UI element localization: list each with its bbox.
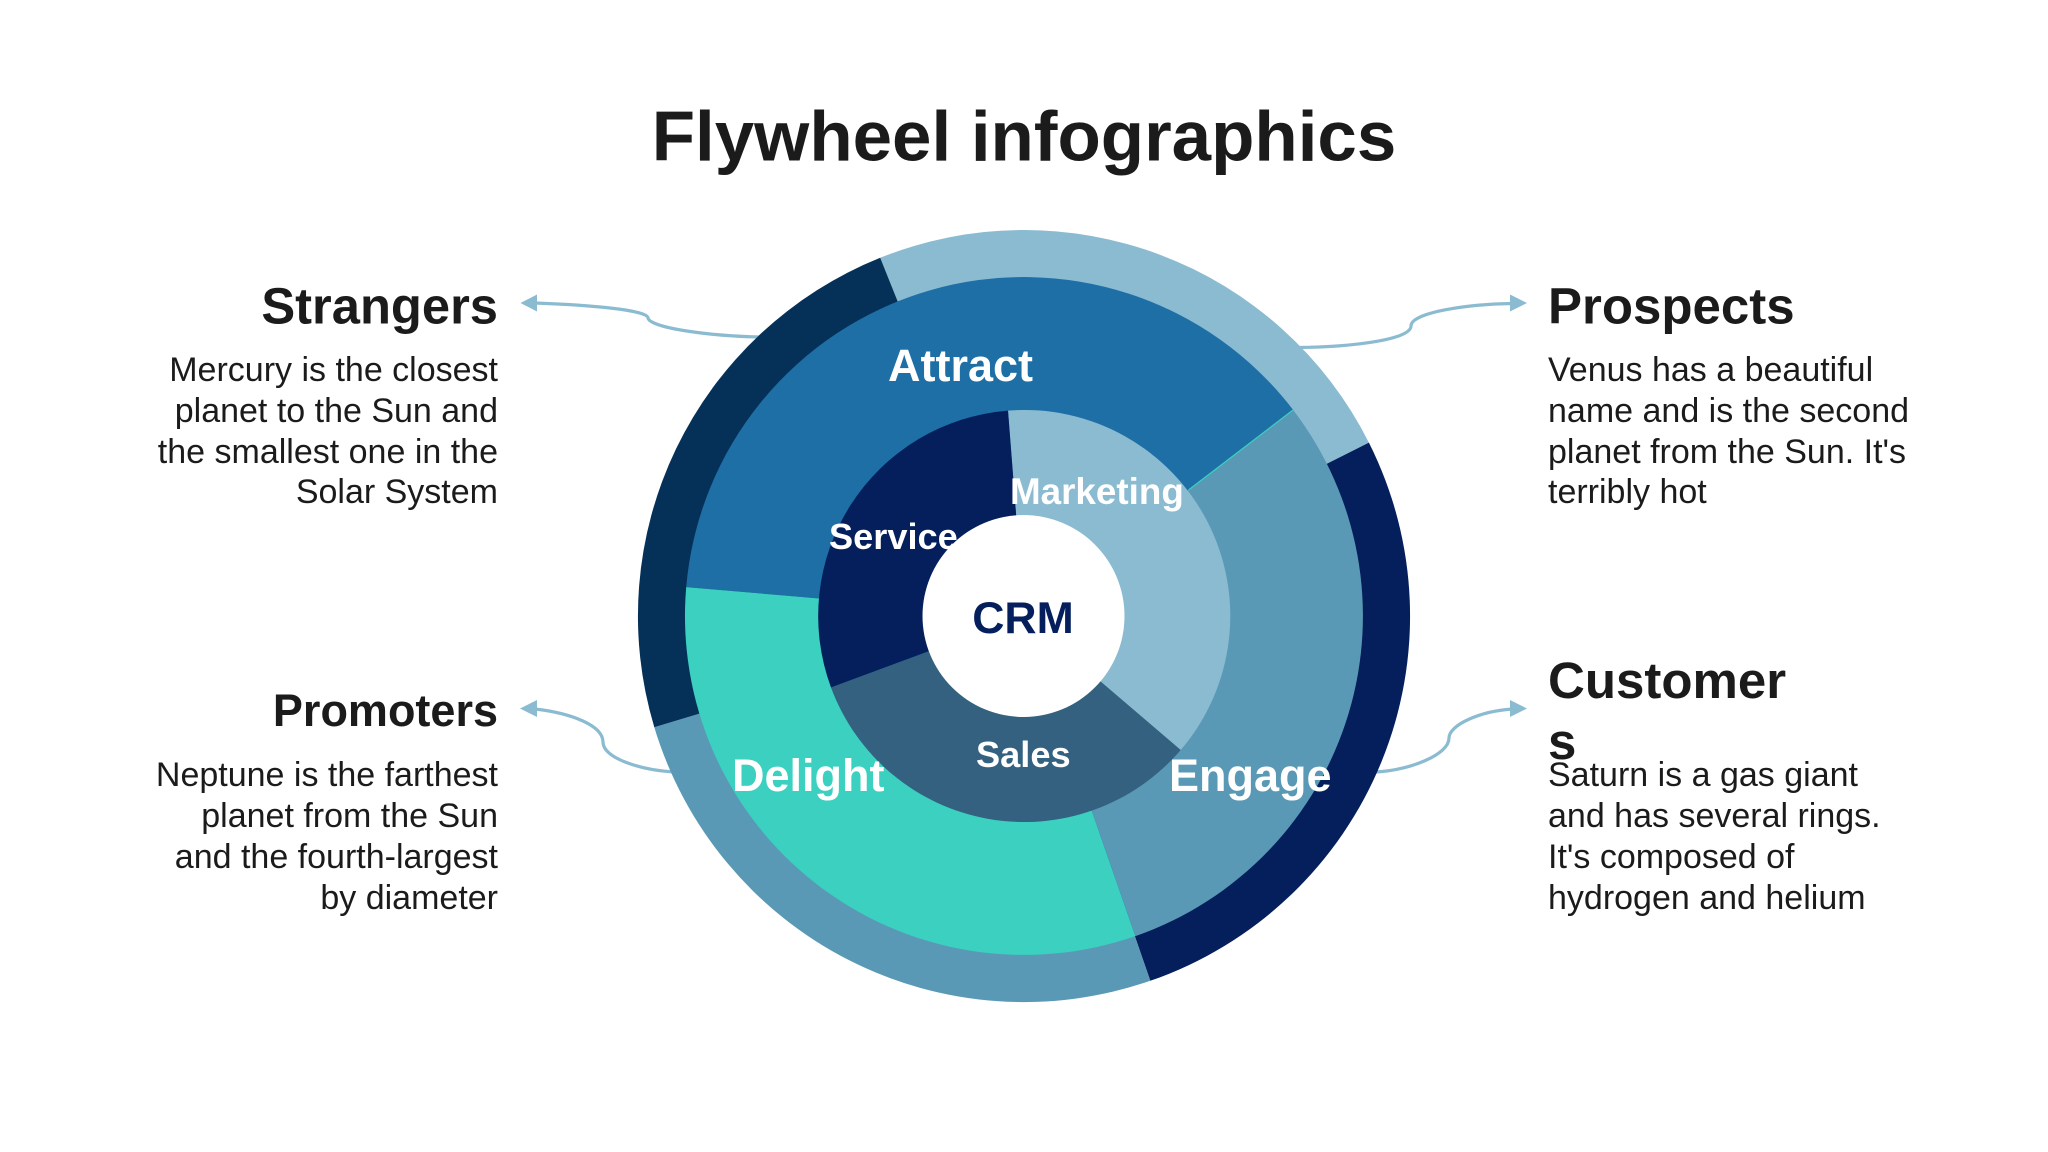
text block: prospects: Venus has a beautiful [1548,351,1873,389]
heading: promoters: Promoters [273,685,498,736]
arrow: prospects connector [1298,294,1527,348]
text block: customers: It's composed of [1548,838,1795,876]
text block: customers: hydrogen and helium [1548,879,1866,917]
heading: prospects: Prospects [1548,278,1795,334]
label: CRM: CRM [972,594,1074,643]
text block: strangers: Solar System [296,473,498,511]
heading: customers: s [1548,713,1576,770]
outer ring [638,230,1410,1002]
text block: customers: and has several rings. [1548,797,1881,835]
label: Engage: Engage [1169,750,1332,801]
label: Delight: Delight [732,750,885,801]
label: Attract: Attract [888,340,1033,391]
title: Flywheel infographics [652,98,1396,176]
arrow: strangers connector [520,294,760,337]
arrow: customers connector [1375,700,1527,772]
text block: prospects: name and is the second [1548,392,1909,430]
label: Service: Service [829,516,958,557]
panel: prospects [1548,278,1909,511]
text block: strangers: planet to the Sun and [175,392,498,430]
inner ring [818,410,1230,822]
text block: strangers: the smallest one in the [158,433,498,471]
heading: strangers: Strangers [261,278,498,334]
panel: customers [1548,652,1881,917]
arrow: promoters connector [520,700,674,772]
text block: promoters: Neptune is the farthest [156,756,499,794]
text block: customers: Saturn is a gas giant [1548,756,1859,794]
label: Sales: Sales [976,734,1071,775]
text block: promoters [156,756,499,917]
text block: prospects: planet from the Sun. It's [1548,433,1906,471]
text block: promoters: by diameter [320,879,498,917]
text block: strangers [158,351,499,511]
text block: promoters: and the fourth-largest [175,838,499,876]
text block: promoters: planet from the Sun [201,797,498,835]
label: Marketing: Marketing [1010,471,1184,512]
text block: prospects: terribly hot [1548,473,1707,511]
text block: customers [1548,756,1881,917]
text block: strangers: Mercury is the closest [169,351,499,389]
flywheel diagram [638,230,1410,1002]
heading: customers [1548,652,1786,770]
heading: customers: Customer [1548,652,1786,709]
panel: promoters [156,685,499,917]
centre circle [922,515,1124,717]
middle ring [685,277,1363,955]
panel: strangers [158,278,499,511]
text block: prospects [1548,351,1909,511]
